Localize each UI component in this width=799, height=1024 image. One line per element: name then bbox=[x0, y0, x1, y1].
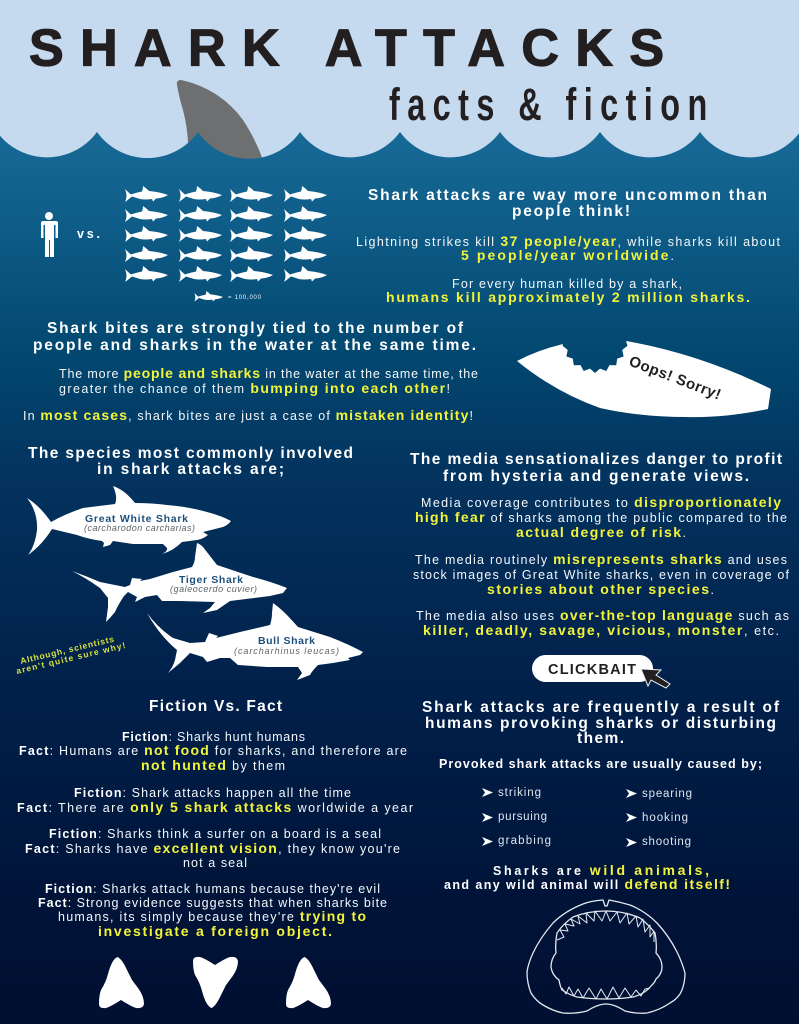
text block: media: high fear of sharks among the public compared to the bbox=[415, 509, 787, 525]
heading: Shark attacks are frequently a result of bbox=[422, 699, 780, 716]
list: causes: grabbing bbox=[498, 835, 551, 847]
text block: uncommon attacks: people think! bbox=[512, 203, 630, 220]
panel: species: in shark attacks are; bbox=[97, 461, 284, 478]
illustration: shark jaw bbox=[527, 900, 685, 1013]
legend: one shark equals 100,000: = 100,000 bbox=[228, 295, 262, 301]
list: causes: hooking bbox=[642, 812, 688, 824]
closing statement: Sharks are wild animals, bbox=[493, 862, 709, 878]
bull shark bbox=[147, 603, 363, 680]
text block: bites and numbers: people and sharks in the water at the same time. bbox=[33, 337, 476, 354]
illustration: bitten surfboard bbox=[517, 341, 771, 417]
clickbait button bbox=[532, 655, 670, 688]
panel: fiction vs fact: humans, its simply because they're trying to bbox=[58, 908, 366, 924]
vs label: vs. bbox=[77, 227, 100, 241]
icon: person bbox=[41, 212, 58, 257]
list: causes bbox=[482, 787, 692, 848]
humans kill sharks: For every human killed by a shark, bbox=[452, 277, 682, 291]
heading: Fiction Vs. Fact bbox=[149, 698, 282, 715]
panel: people vs sharks killed bbox=[41, 186, 327, 302]
note: scientists unsure: aren't quite sure why! bbox=[15, 640, 127, 676]
text block: uncommon attacks bbox=[356, 187, 781, 305]
heading: Shark bites are strongly tied to the number of bbox=[47, 320, 464, 337]
paragraph: language: The media also uses over-the-top language such as bbox=[416, 607, 789, 623]
note: scientists unsure: Although, scientists bbox=[19, 634, 115, 666]
icons: shark teeth bbox=[99, 957, 331, 1008]
heading: The species most commonly involved bbox=[28, 445, 353, 462]
bull shark: (carcharhinus leucas) bbox=[234, 646, 339, 656]
panel: fiction vs fact: investigate a foreign object. bbox=[98, 923, 332, 939]
list: causes: shooting bbox=[642, 836, 691, 848]
lightning comparison: Lightning strikes kill 37 people/year, while sharks kill about bbox=[356, 233, 781, 249]
list: causes: pursuing bbox=[498, 811, 547, 823]
great white shark bbox=[27, 486, 231, 555]
subheading: Provoked shark attacks are usually caused by; bbox=[439, 757, 762, 771]
caption: Oops! Sorry!: Oops! Sorry! bbox=[627, 353, 723, 403]
panel: fiction vs fact: Fact: Strong evidence suggests that when sharks bite bbox=[38, 896, 387, 910]
text block: bites and numbers: greater the chance of them bumping into each other! bbox=[59, 380, 450, 396]
text block: bites and numbers bbox=[23, 320, 478, 423]
text block: media: stories about other species. bbox=[487, 581, 714, 597]
list: causes: striking bbox=[498, 787, 541, 799]
text block: media bbox=[410, 451, 790, 638]
panel: provoked attacks bbox=[422, 699, 780, 892]
text block: media: from hysteria and generate views. bbox=[443, 468, 749, 485]
text block: media: killer, deadly, savage, vicious, monster, etc. bbox=[423, 622, 779, 638]
pair three: Fiction: Sharks think a surfer on a board is a seal bbox=[49, 827, 381, 841]
pair two: Fiction: Shark attacks happen all the time bbox=[74, 786, 351, 800]
panel: fiction vs fact bbox=[17, 698, 413, 939]
text block: media: actual degree of risk. bbox=[516, 524, 686, 540]
text block: bites and numbers: In most cases, shark bites are just a case of mistaken identity! bbox=[23, 407, 473, 423]
pair one: Fiction: Sharks hunt humans bbox=[122, 730, 305, 744]
panel: provoked attacks: and any wild animal will defend itself! bbox=[444, 876, 730, 892]
tiger shark: Tiger Shark bbox=[179, 574, 243, 586]
list: causes: spearing bbox=[642, 788, 692, 800]
heading: Shark attacks are way more uncommon than bbox=[368, 187, 767, 204]
subtitle: facts & fiction bbox=[389, 81, 707, 130]
pair four: Fiction: Sharks attack humans because they're evil bbox=[45, 882, 380, 896]
great white shark: (carcharodon carcharias) bbox=[84, 523, 195, 533]
tiger shark bbox=[72, 543, 287, 622]
clickbait button: CLICKBAIT bbox=[548, 662, 636, 678]
text block: uncommon attacks: humans kill approximately 2 million sharks. bbox=[386, 289, 750, 305]
icon: cursor bbox=[641, 669, 670, 688]
panel: species bbox=[15, 445, 363, 680]
panel: provoked attacks: them. bbox=[577, 730, 624, 747]
panel: provoked attacks: humans provoking sharks or disturbing bbox=[425, 715, 776, 732]
panel: fiction vs fact: not hunted by them bbox=[141, 757, 285, 773]
great white shark: Great White Shark bbox=[85, 513, 188, 525]
legend: one shark equals 100,000 bbox=[194, 291, 262, 302]
bull shark: Bull Shark bbox=[258, 635, 315, 647]
body: The more people and sharks in the water at the same time, the bbox=[59, 365, 478, 381]
title: SHARK ATTACKS bbox=[29, 20, 664, 78]
text block: media: stock images of Great White sharks, even in coverage of bbox=[413, 568, 790, 582]
panel: fiction vs fact: Fact: Humans are not food for sharks, and therefore are bbox=[19, 742, 407, 758]
pictogram: rows of sharks bbox=[125, 186, 327, 282]
icon: shark fin bbox=[177, 80, 263, 165]
heading: The media sensationalizes danger to profit bbox=[410, 451, 782, 468]
text block: uncommon attacks: 5 people/year worldwide. bbox=[461, 247, 674, 263]
paragraph: fear: Media coverage contributes to disproportionately bbox=[421, 494, 781, 510]
panel: fiction vs fact: Fact: Sharks have excellent vision, they know you're bbox=[25, 840, 400, 856]
panel: fiction vs fact: Fact: There are only 5 shark attacks worldwide a year bbox=[17, 799, 413, 815]
panel: fiction vs fact: not a seal bbox=[183, 856, 247, 870]
tiger shark: (galeocerdo cuvier) bbox=[170, 584, 257, 594]
paragraph: misrepresentation: The media routinely misrepresents sharks and uses bbox=[415, 551, 787, 567]
